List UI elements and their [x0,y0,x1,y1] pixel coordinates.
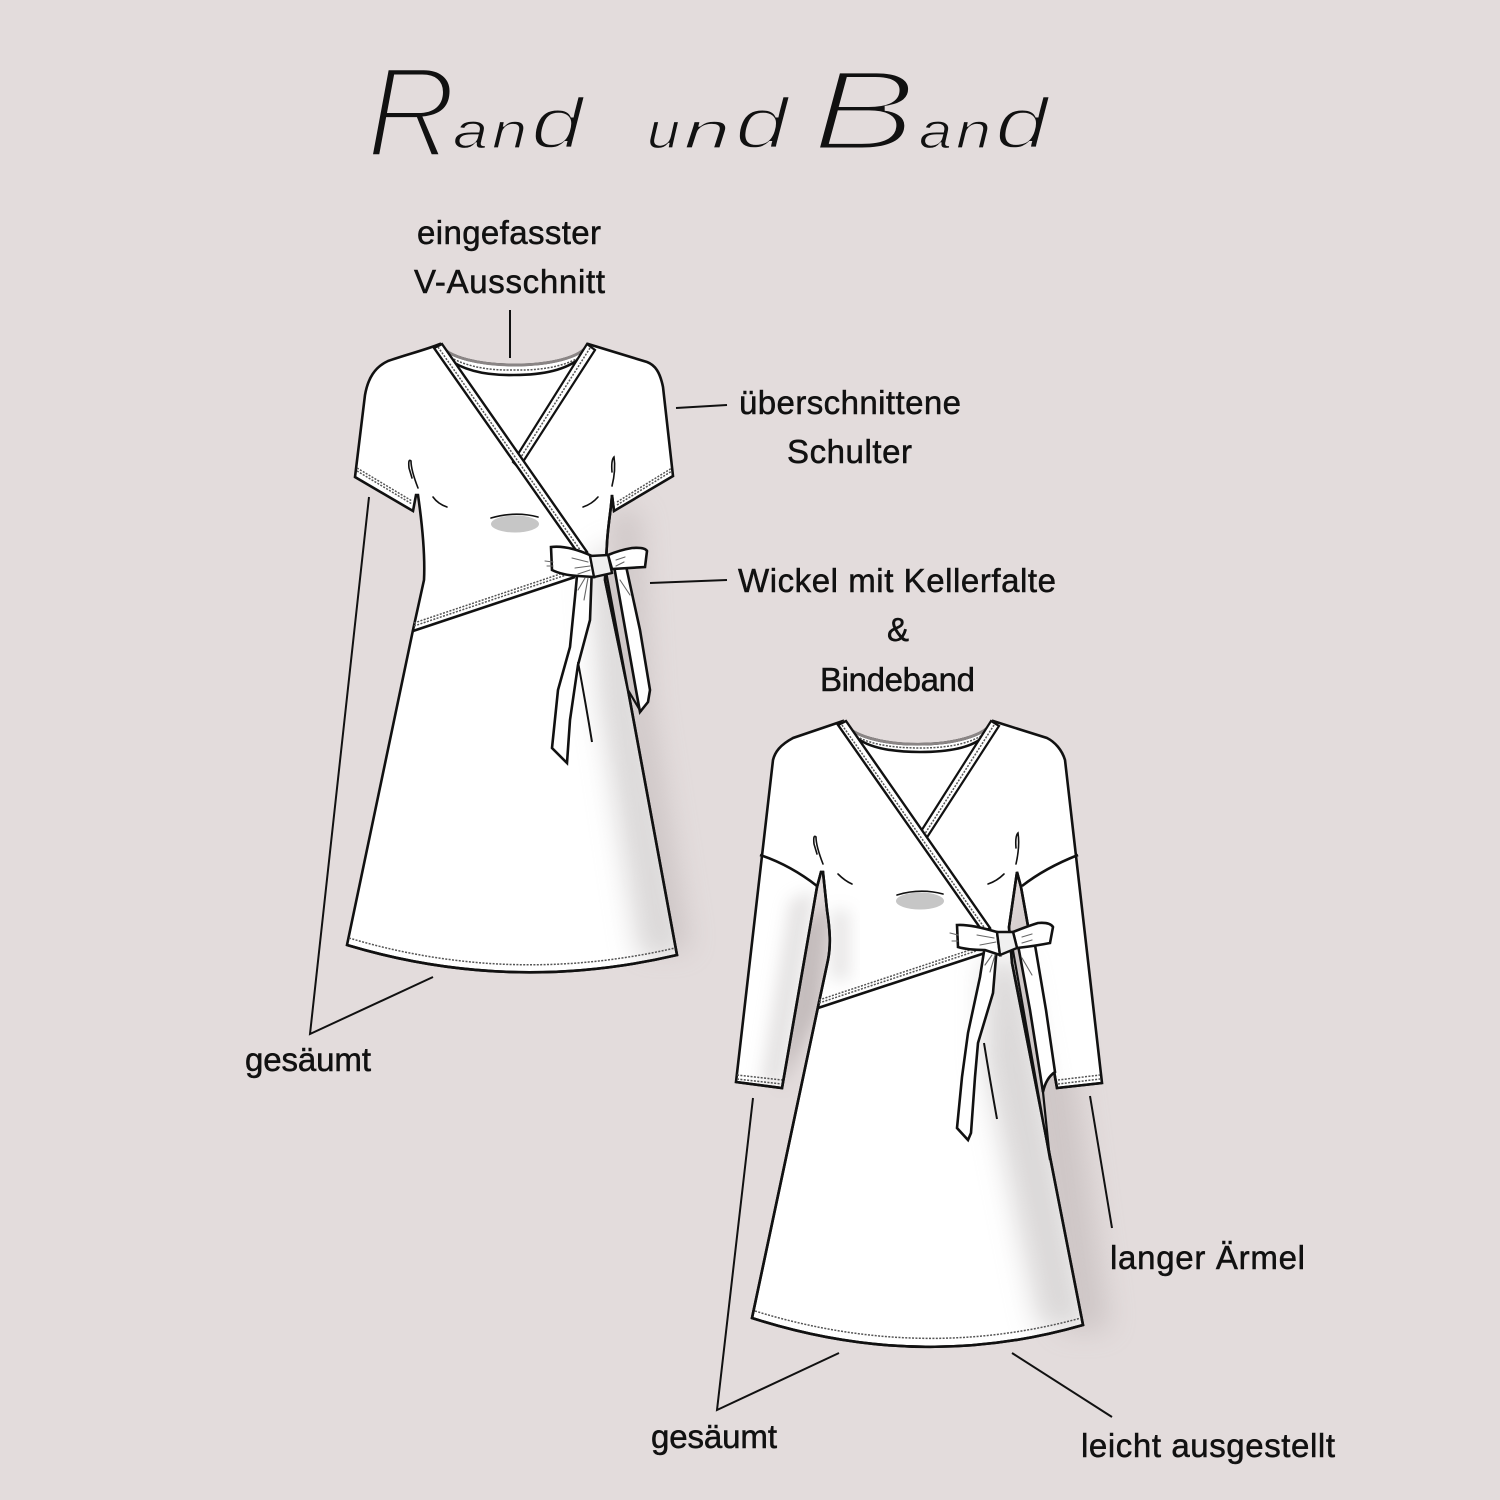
label: langer Ärmel: langer Ärmel [1110,1239,1305,1276]
right tie tail [614,566,650,712]
cuff stitching [737,1075,1100,1084]
title: a [919,103,952,159]
label: eingefasster V-Ausschnitt: eingefasster [417,214,601,251]
bow left loop [957,925,1000,955]
inner tail line [984,1043,997,1119]
tail shaded strip [1012,945,1050,1160]
bow right loop [608,548,647,569]
label: eingefasster V-Ausschnitt [414,214,605,300]
inner skirt shading [590,540,690,960]
label: Wickel mit Kellerfalte & Bindeband: & [887,611,909,648]
short-sleeve wrap dress [347,344,690,972]
right neckline band [918,721,999,842]
leader line: long sleeve [1090,1096,1112,1228]
neck binding [843,721,993,752]
leader lines: hem long dress [717,1098,839,1410]
title: a [453,103,488,159]
dress outline [736,721,1102,1347]
right tie tail [1018,945,1055,1092]
right neckline band [513,344,595,468]
title: d [735,85,791,164]
inner tail line [578,662,592,742]
outside shadow, long-sleeve dress [780,880,1110,1330]
label: überschnittene Schulter: Schulter [787,433,912,470]
neck binding [440,344,588,375]
wrap lower edge [818,948,985,1008]
label: überschnittene Schulter: überschnittene [739,384,961,421]
inner shading [760,890,1090,1330]
title: n [492,103,527,159]
fold marks [409,457,615,507]
title: n [956,103,991,159]
dress outline [347,344,677,972]
label: eingefasster V-Ausschnitt: V-Ausschnitt [414,263,605,300]
title: R [366,39,456,185]
redraw outline [347,495,677,972]
label: Wickel mit Kellerfalte & Bindeband [738,562,1056,698]
bow knot [997,932,1017,955]
leader lines: hem short dress [310,497,433,1034]
title: d [995,85,1051,164]
leader line: neckline [509,310,511,358]
armhole seams [760,855,1078,886]
label: Wickel mit Kellerfalte & Bindeband: Wickel mit Kellerfalte [738,562,1056,599]
bust shadow [896,891,944,910]
title: B [811,47,917,175]
crossing neckline band [434,344,587,556]
title: n [684,103,730,159]
leader line: wrap [650,580,727,583]
wrap lower edge [413,570,575,631]
leader line: shoulder [676,405,727,408]
hem stitching, short dress [349,938,675,965]
bow right loop [1013,923,1053,948]
left tie tail [552,565,592,763]
outside shadow, short-sleeve dress [610,510,690,950]
bust shadow [491,514,539,532]
label: überschnittene Schulter [739,384,961,470]
label: leicht ausgestellt: leicht ausgestellt [1081,1427,1335,1464]
fold marks [814,833,1019,884]
tail shaded strip [605,566,641,712]
bow gather lines [950,933,1032,975]
label: Wickel mit Kellerfalte & Bindeband: Bindeband [820,661,975,698]
title: d [531,85,586,164]
title: u [647,103,680,159]
leader line: flared [1012,1353,1112,1417]
long-sleeve wrap dress [736,721,1110,1347]
bow knot [590,555,612,577]
left tie tail [957,945,997,1140]
sleeve hems stitching [357,468,672,505]
bow gather lines [545,557,630,600]
label: gesäumt short dress: gesäumt [245,1041,371,1078]
crossing neckline band [838,721,990,932]
hem stitching [755,1311,1081,1338]
redraw outline [736,872,1102,1347]
title [366,39,1051,185]
bow left loop [551,547,594,577]
label: gesäumt long dress: gesäumt [651,1418,777,1455]
